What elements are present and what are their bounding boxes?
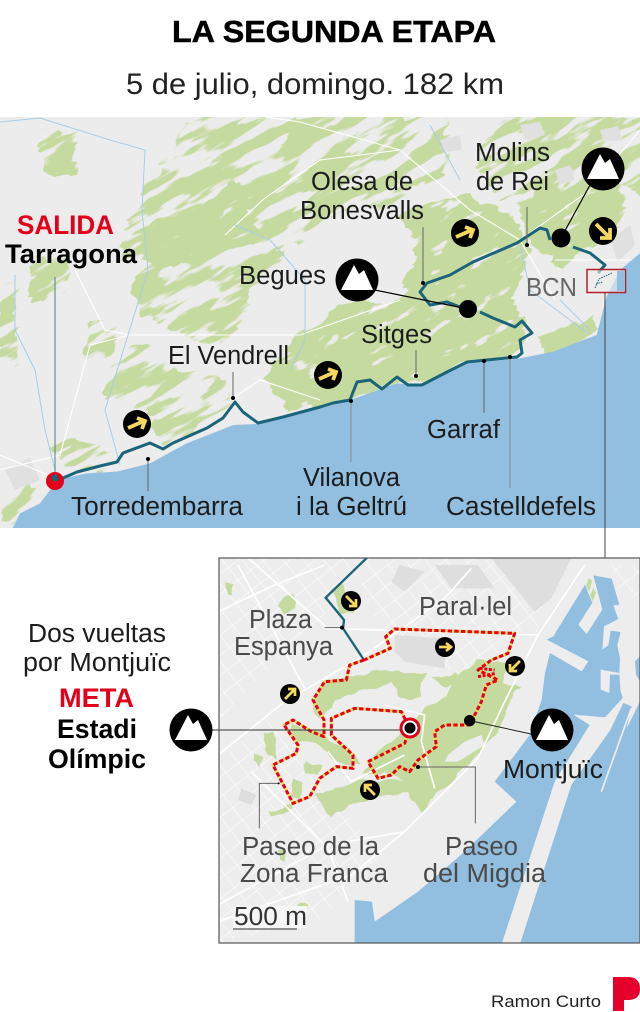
icon: arrow 4: [589, 217, 617, 245]
labels: places: El Vendrell: [168, 342, 289, 370]
label: dos vueltas: [23, 620, 171, 677]
labels: inset places: Plaza: [249, 606, 313, 634]
icon: mountain Vallvidrera: [582, 148, 624, 190]
scale bar: 500 m: [234, 903, 307, 931]
parks: [225, 585, 520, 910]
labels: inset places: Paseo: [445, 833, 518, 861]
labels: places: Begues: [239, 262, 326, 290]
label: meta: [48, 683, 146, 774]
labels: places: Bonesvalls: [300, 197, 424, 225]
streets: [218, 555, 585, 922]
finish pointer line: [200, 729, 400, 731]
leader lines: [55, 207, 527, 491]
label: dos vueltas: por Montjuïc: [23, 649, 171, 677]
label: dos vueltas: Dos vueltas: [28, 620, 166, 648]
label: salida: Tarragona: [5, 239, 137, 269]
icon: mountain Montjuïc: [530, 708, 574, 752]
connector line to inset: [604, 293, 606, 558]
labels: inset places: Espanya: [234, 633, 334, 661]
labels: inset places: Zona Franca: [240, 860, 389, 888]
label: meta: Olímpic: [48, 744, 146, 774]
credit: Ramon Curto: [491, 992, 601, 1011]
icon: arrow 2: [314, 361, 342, 389]
icon: mountain Begues: [336, 258, 378, 302]
route: [55, 228, 605, 478]
logo: [613, 977, 640, 1011]
icon: inset arrow 5: [360, 780, 380, 800]
subtitle: 5 de julio, domingo. 182 km: [126, 68, 504, 101]
urban patches: [5, 122, 635, 490]
labels: places: BCN: [526, 274, 577, 302]
icon: inset arrow 3: [505, 656, 525, 676]
icon: inset arrow 1: [341, 591, 361, 611]
box: Montjuïc location: [587, 270, 626, 292]
icon: arrow 1: [123, 410, 151, 438]
labels: places: Vilanova: [303, 464, 401, 492]
street blocks: [238, 558, 571, 805]
vegetation: [0, 117, 640, 526]
route: circuit: [273, 629, 515, 803]
title: LA SEGUNDA ETAPA: [172, 14, 496, 49]
labels: places: i la Geltrú: [296, 493, 407, 521]
labels: places: [71, 139, 596, 521]
labels: inset places: del Migdia: [423, 860, 547, 888]
sea: [355, 575, 640, 945]
labels: inset places: [234, 593, 603, 888]
panel: Montjuïc inset map: [218, 555, 640, 945]
icon: arrow 3: [451, 219, 479, 247]
labels: places: de Rei: [476, 168, 549, 196]
route: approach: [326, 558, 367, 660]
label: salida: [5, 210, 137, 269]
labels: places: Castelldefels: [446, 493, 596, 521]
icon: inset arrow 4: [280, 684, 300, 704]
label: salida: SALIDA: [17, 210, 114, 240]
start marker: [46, 472, 64, 490]
label: meta: Estadi: [57, 714, 137, 744]
leader dots: [146, 243, 529, 461]
dots: [278, 626, 475, 784]
finish marker: [401, 719, 419, 737]
leader lines inset: [259, 628, 551, 828]
label: meta: META: [59, 683, 134, 713]
labels: inset places: Paseo de la: [242, 833, 380, 861]
sea: [12, 407, 333, 530]
inset frame: [219, 558, 640, 943]
roads: [0, 117, 640, 480]
labels: inset places: Paral·lel: [419, 593, 512, 621]
peak markers and pointer lines: [365, 185, 590, 318]
labels: places: Torredembarra: [71, 493, 244, 521]
rivers: [0, 118, 590, 470]
street grid: [218, 555, 640, 942]
icon: inset arrow 2: [435, 637, 455, 657]
labels: places: Olesa de: [311, 168, 413, 196]
labels: places: Sitges: [361, 321, 432, 349]
panel: regional map: [0, 117, 640, 528]
labels: places: Molins: [475, 139, 550, 167]
icon: mountain finish: [170, 708, 212, 752]
labels: inset places: Montjuïc: [503, 756, 603, 784]
labels: places: Garraf: [427, 416, 501, 444]
